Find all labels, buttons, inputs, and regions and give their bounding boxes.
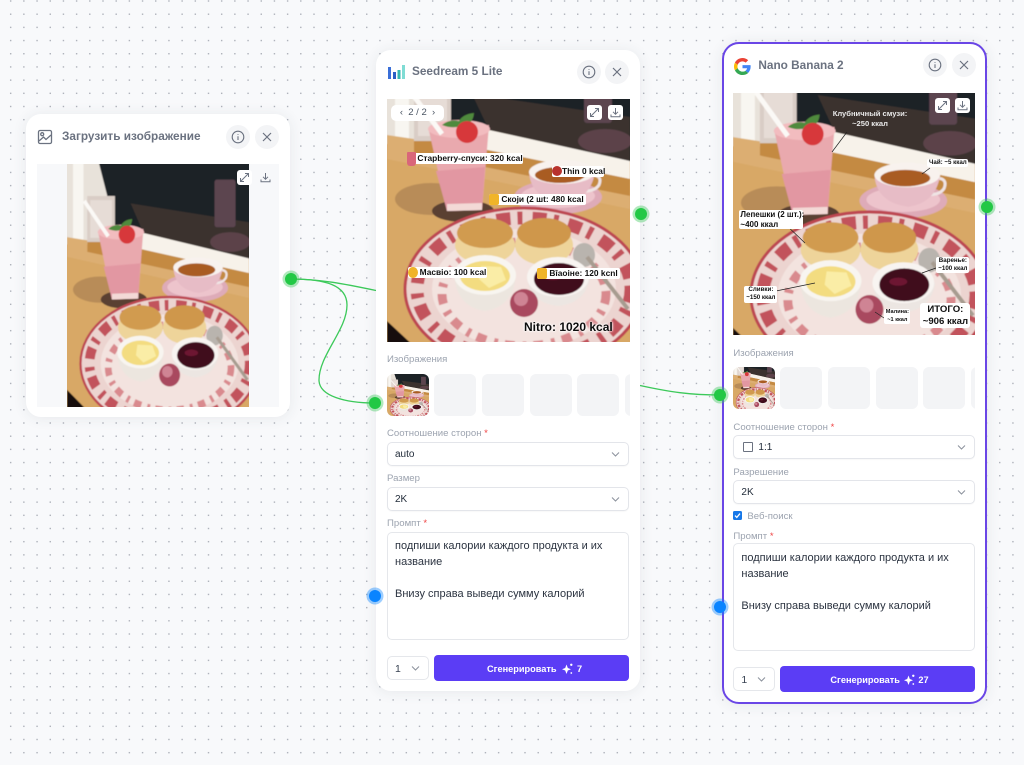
- label: scones: Лепешки (2 шт.):: [740, 210, 804, 219]
- textarea: prompt: подпиши калории каждого продукта и их: [741, 552, 949, 564]
- label: images: Изображения: [387, 354, 447, 365]
- icon: image: [38, 130, 52, 144]
- label: aspect ratio: Соотношение сторон *: [387, 428, 488, 439]
- label: jam: [936, 257, 969, 273]
- button: close: [605, 60, 629, 84]
- label: total: ~906 ккал: [923, 316, 968, 327]
- icon: Google G: [734, 58, 751, 75]
- image slots: [387, 374, 630, 416]
- button: close: [952, 53, 976, 77]
- label: cream: ~150 ккал: [746, 294, 776, 301]
- label: raspberry: Малина:: [886, 309, 909, 315]
- button: expand: [935, 98, 950, 113]
- button: generate: Сгенерировать: [830, 675, 900, 685]
- label: prompt: Промпт *: [733, 531, 774, 542]
- label: total: [920, 303, 970, 328]
- panel: Nano Banana 2: [722, 42, 987, 704]
- label: cream: [744, 286, 777, 303]
- select: resolution: [733, 480, 975, 504]
- icon: Seedream bars: [388, 65, 405, 79]
- label: jam: Варенье:: [939, 257, 967, 264]
- button: download: [955, 98, 970, 113]
- button: expand: [237, 170, 252, 185]
- select: count: [733, 667, 775, 691]
- label: smoothie: [833, 109, 907, 128]
- label: scones: Скоjи (2 шt: 480 kcal: [501, 194, 584, 204]
- button: download: [258, 170, 273, 185]
- label: prompt: Промпт *: [387, 518, 427, 529]
- photo: Seedream result: [387, 99, 630, 342]
- label: raspberry: ~1 ккал: [887, 317, 907, 323]
- textarea: prompt: название: [395, 556, 442, 568]
- select: size: [387, 487, 629, 511]
- heading: Seedream: Seedream 5 Lite: [412, 64, 502, 78]
- calorie labels: [407, 152, 620, 334]
- select: count: [387, 656, 429, 680]
- label: butter: Масвіо: 100 kcal: [420, 267, 486, 277]
- handle: Nano prompt input: [714, 601, 726, 613]
- label: total: ИТОГО:: [927, 304, 963, 315]
- label: raspberry: [884, 309, 910, 324]
- label: scones: [739, 210, 803, 229]
- label: total: Nitro: 1020 kcal: [524, 320, 613, 334]
- button: generate: 27: [918, 675, 929, 685]
- photo: original food photo: [67, 164, 249, 407]
- handle: Nano output: [981, 201, 993, 213]
- textarea: prompt: Внизу справа выведи сумму калорий: [395, 588, 585, 600]
- button: info: [577, 60, 601, 84]
- label: smoothie: Старberry-спуси: 320 kcal: [417, 153, 523, 163]
- select: aspect ratio: [733, 435, 975, 459]
- handle: Seedream prompt input: [369, 590, 381, 602]
- label: tea: Чай: ~5 ккал: [929, 159, 967, 166]
- label: scones: ~400 ккал: [740, 220, 778, 229]
- panel: upload image: [26, 114, 290, 417]
- label: web search: Веб-поиск: [747, 511, 793, 522]
- button: close: [255, 125, 279, 149]
- page counter: ‹ 2 / 2 ›: [400, 107, 435, 118]
- label: images: Изображения: [733, 348, 794, 359]
- select: aspect ratio: 1:1: [758, 442, 772, 453]
- label: jam: ~100 ккал: [938, 265, 968, 272]
- image frame: [37, 164, 279, 407]
- textarea: prompt: [733, 543, 975, 651]
- button: expand: [587, 105, 602, 120]
- button: info: [923, 53, 947, 77]
- textarea: prompt: Внизу справа выведи сумму калорий: [741, 600, 931, 612]
- textarea: prompt: [387, 532, 629, 640]
- handle: Seedream output: [635, 208, 647, 220]
- handle: Seedream image input: [369, 397, 381, 409]
- select: resolution: 2K: [741, 487, 754, 498]
- button: info: [226, 125, 250, 149]
- button: download: [608, 105, 623, 120]
- heading: upload: Загрузить изображение: [62, 129, 201, 143]
- heading: Nano Banana: Nano Banana 2: [758, 58, 844, 72]
- button: generate: [434, 655, 629, 681]
- label: smoothie: ~250 ккал: [852, 119, 888, 128]
- label: smoothie: Клубничный смузи:: [833, 109, 907, 118]
- image slots: [733, 367, 975, 409]
- checkbox: web search: [733, 511, 742, 520]
- thumbnail: [387, 374, 429, 416]
- label: aspect ratio: Соотношение сторон *: [733, 422, 834, 433]
- select: size: 2K: [395, 494, 407, 505]
- label: resolution: Разрешение: [733, 467, 789, 478]
- select: count: 1: [741, 674, 747, 686]
- photo: Nano Banana result: [733, 93, 975, 335]
- select: count: 1: [395, 663, 401, 675]
- label: jam: Вîаoіне: 120 kcnl: [549, 268, 618, 278]
- thumbnail: [733, 367, 775, 409]
- page counter: [391, 105, 444, 121]
- calorie leader lines: [777, 132, 936, 318]
- button: generate: Сгенерировать: [487, 664, 556, 674]
- label: tea: Thin 0 kcal: [562, 166, 605, 176]
- label: size: Размер: [387, 473, 420, 484]
- button: generate: [780, 666, 975, 692]
- panel: Seedream 5 Lite: [376, 50, 640, 691]
- label: cream: Сливки:: [748, 286, 773, 293]
- handle: Nano image input: [714, 389, 726, 401]
- select: aspect ratio: [387, 442, 629, 466]
- select: aspect ratio: auto: [395, 449, 414, 460]
- textarea: prompt: подпиши калории каждого продукта и их: [395, 540, 602, 552]
- button: generate: 7: [577, 664, 582, 674]
- textarea: prompt: название: [741, 568, 789, 580]
- handle: upload output: [285, 273, 297, 285]
